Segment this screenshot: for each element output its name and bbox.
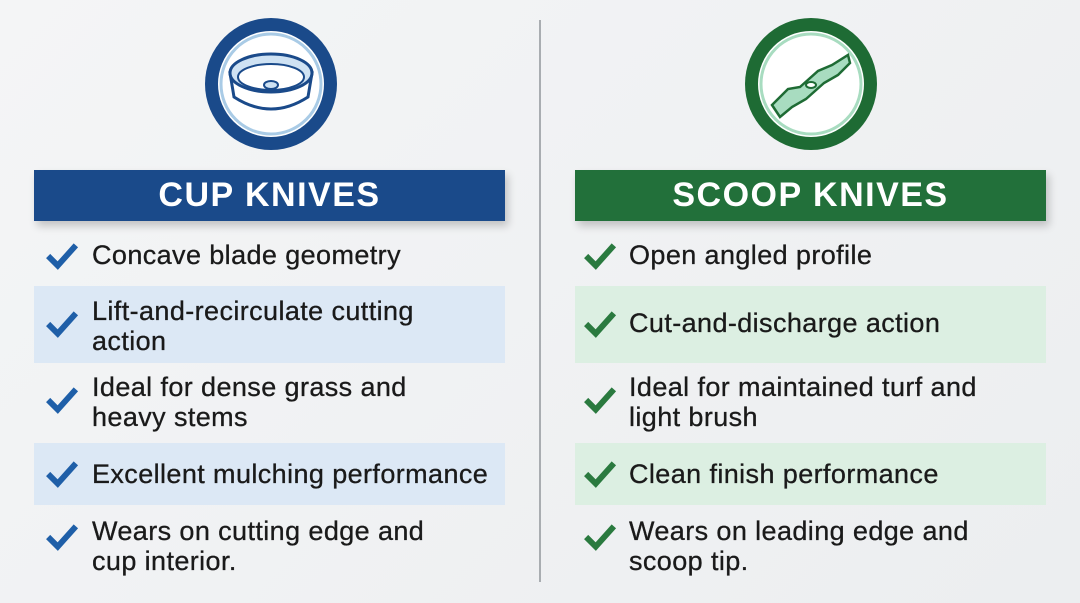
list: cup knives: heavy stems — [92, 402, 248, 432]
band shading left — [34, 286, 505, 363]
list: cup knives: Lift-and-recirculate cutting — [92, 296, 414, 326]
heading: scoop knives — [575, 170, 1046, 221]
list: cup knives: Ideal for dense grass and — [92, 372, 407, 402]
list: cup knives: Wears on cutting edge and — [92, 516, 424, 546]
band shading right — [575, 286, 1046, 363]
list: cup knives: cup interior. — [92, 546, 237, 576]
list: scoop knives: Wears on leading edge and — [629, 516, 969, 546]
divider — [539, 20, 541, 582]
list: cup knives: action — [92, 326, 166, 356]
icon: cup knife — [205, 18, 337, 150]
heading: scoop knives: SCOOP KNIVES — [672, 176, 949, 214]
list: scoop knives: Open angled profile — [629, 240, 872, 270]
list: scoop knives: Clean finish performance — [629, 459, 939, 489]
list: scoop knives: scoop tip. — [629, 546, 749, 576]
list: scoop knives: Cut-and-discharge action — [629, 308, 940, 338]
list: cup knives: Excellent mulching performance — [92, 459, 488, 489]
icon: scoop knife — [745, 18, 877, 150]
list: cup knives: Concave blade geometry — [92, 240, 401, 270]
list: scoop knives: Ideal for maintained turf and — [629, 372, 977, 402]
heading: cup knives: CUP KNIVES — [158, 176, 381, 214]
list: cup knives — [46, 240, 488, 576]
heading: cup knives — [34, 170, 505, 221]
list: scoop knives: light brush — [629, 402, 758, 432]
list: scoop knives — [584, 240, 977, 576]
